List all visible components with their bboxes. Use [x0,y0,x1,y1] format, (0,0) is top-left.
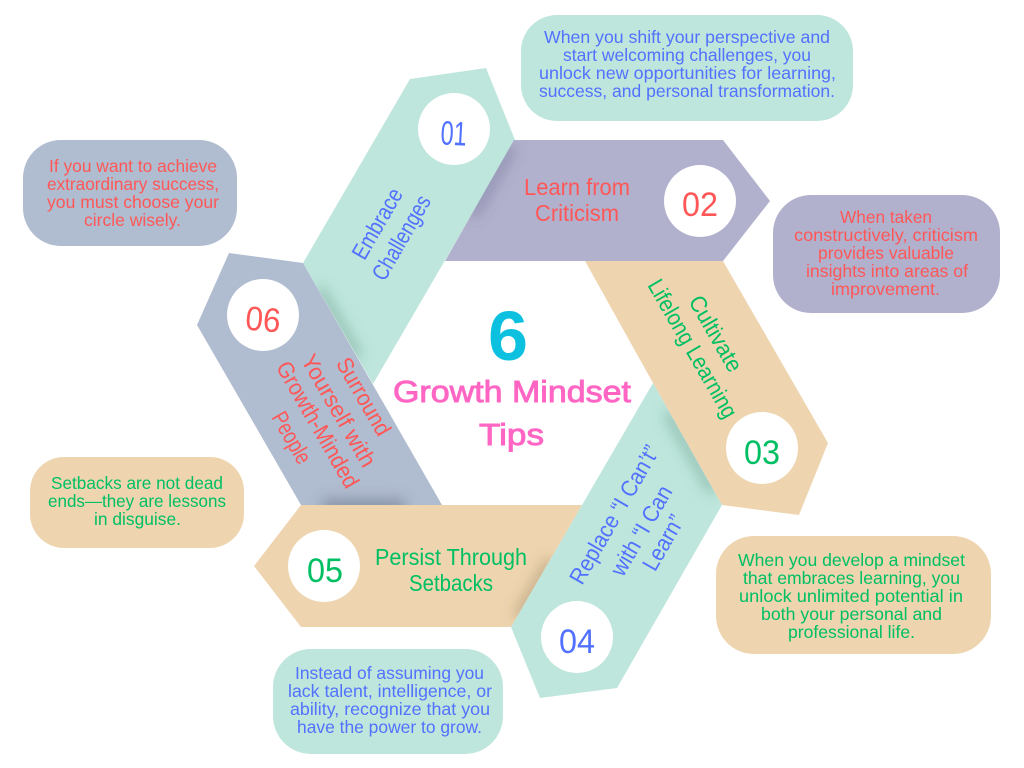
number badge 02: 02 [682,186,718,224]
callout 01: start welcoming challenges, you [563,45,811,65]
label: Persist Through Setbacks: Persist Through [375,544,527,570]
ribbon 06 [197,253,442,505]
number badge 01 [418,93,490,165]
number badge 05: 05 [307,552,343,590]
label: Surround Yourself with Growth-Minded People: People [267,407,317,468]
label: Learn from Criticism [524,174,630,226]
title: 6 Growth Mindset Tips [393,297,631,452]
panel: tip 01 Embrace Challenges [303,68,515,384]
callout 04: ability, recognize that you [290,699,490,719]
panel: tip 03 Cultivate Lifelong Learning [585,261,828,515]
number badge 01: 01 [440,114,468,154]
callout 03: both your personal and [761,604,942,624]
callout 04: have the power to grow. [297,717,482,737]
number badge 06: 06 [244,300,282,340]
callout 02 [773,195,1000,313]
callout 04: Instead of assuming you [295,663,484,683]
callout 02: insights into areas of [806,261,968,281]
callout 05: in disguise. [94,509,181,529]
number badge 06 [227,279,299,351]
label: Replace I Can't with I Can Learn: Replace “I Can’t” [564,440,664,589]
label: Surround Yourself with Growth-Minded People: Growth-Minded [271,357,365,492]
number badge 04: 04 [559,623,595,661]
callout 05: ends—they are lessons [48,491,226,511]
label: Replace I Can't with I Can Learn: Learn” [637,510,689,575]
callout 06 [23,140,237,246]
callout 02: improvement. [831,279,940,299]
title text: Tips [479,417,544,452]
big numeral 6: 6 [488,297,528,375]
ribbon 04 [511,383,722,698]
panel: tip 06 Surround Yourself with Growth-Minded People [197,253,442,507]
number badge 04 [541,601,613,673]
title text: Growth Mindset [393,374,631,409]
callout 05 [30,457,244,548]
label: Surround Yourself with Growth-Minded People: Yourself with [296,349,382,472]
ribbon 05 [254,505,582,627]
number badge 03: 03 [744,434,780,472]
number badge 02 [664,165,736,237]
callout 03: When you develop a mindset [738,550,965,570]
callout 02: When taken [840,207,932,227]
callout 06: extraordinary success, [47,174,219,194]
callout 02: provides valuable [818,243,954,263]
callout 03: unlock unlimited potential in [739,586,963,606]
panel: tip 04 Replace I Can't with I Can Learn [511,383,722,698]
number badge 03 [726,412,798,484]
ribbon 01 [303,68,515,384]
callout 06: you must choose your [47,192,219,212]
label: Cultivate Lifelong Learning: Lifelong Learning [643,274,743,423]
ribbon 02 [445,140,770,261]
callout 03: that embraces learning, you [743,568,960,588]
title text [393,374,631,452]
label: Surround Yourself with Growth-Minded People [267,349,397,492]
number badge 05 [288,530,360,602]
label: Embrace Challenges: Challenges [366,190,436,285]
label: Persist Through Setbacks [375,544,527,596]
label: Learn from Criticism: Criticism [535,200,619,226]
callout 06: If you want to achieve [49,156,217,176]
callout 01: When you shift your perspective and [544,27,830,47]
callout 02: constructively, criticism [794,225,978,245]
label: Learn from Criticism: Learn from [524,174,630,200]
label: Embrace Challenges [346,183,436,285]
ribbon 03 [585,261,828,515]
callout 06: circle wisely. [84,210,181,230]
callout 01: unlock new opportunities for learning, [539,63,836,83]
callout 03: professional life. [788,622,915,642]
label: Embrace Challenges: Embrace [346,183,408,264]
callout 04: lack talent, intelligence, or [288,681,492,701]
callout 03 [716,536,991,654]
panel: tip 02 Learn from Criticism [445,140,770,261]
callout 05: Setbacks are not dead [51,473,223,493]
label: Persist Through Setbacks: Setbacks [409,570,493,596]
panel: tip 05 Persist Through Setbacks [254,505,582,627]
callout 04 [273,649,503,754]
callout 01: success, and personal transformation. [539,81,835,101]
label: Replace I Can't with I Can Learn: with “I Can [604,481,677,581]
label: Surround Yourself with Growth-Minded People: Surround [331,353,397,440]
callout 01 [521,15,853,121]
label: Cultivate Lifelong Learning: Cultivate [684,291,748,376]
